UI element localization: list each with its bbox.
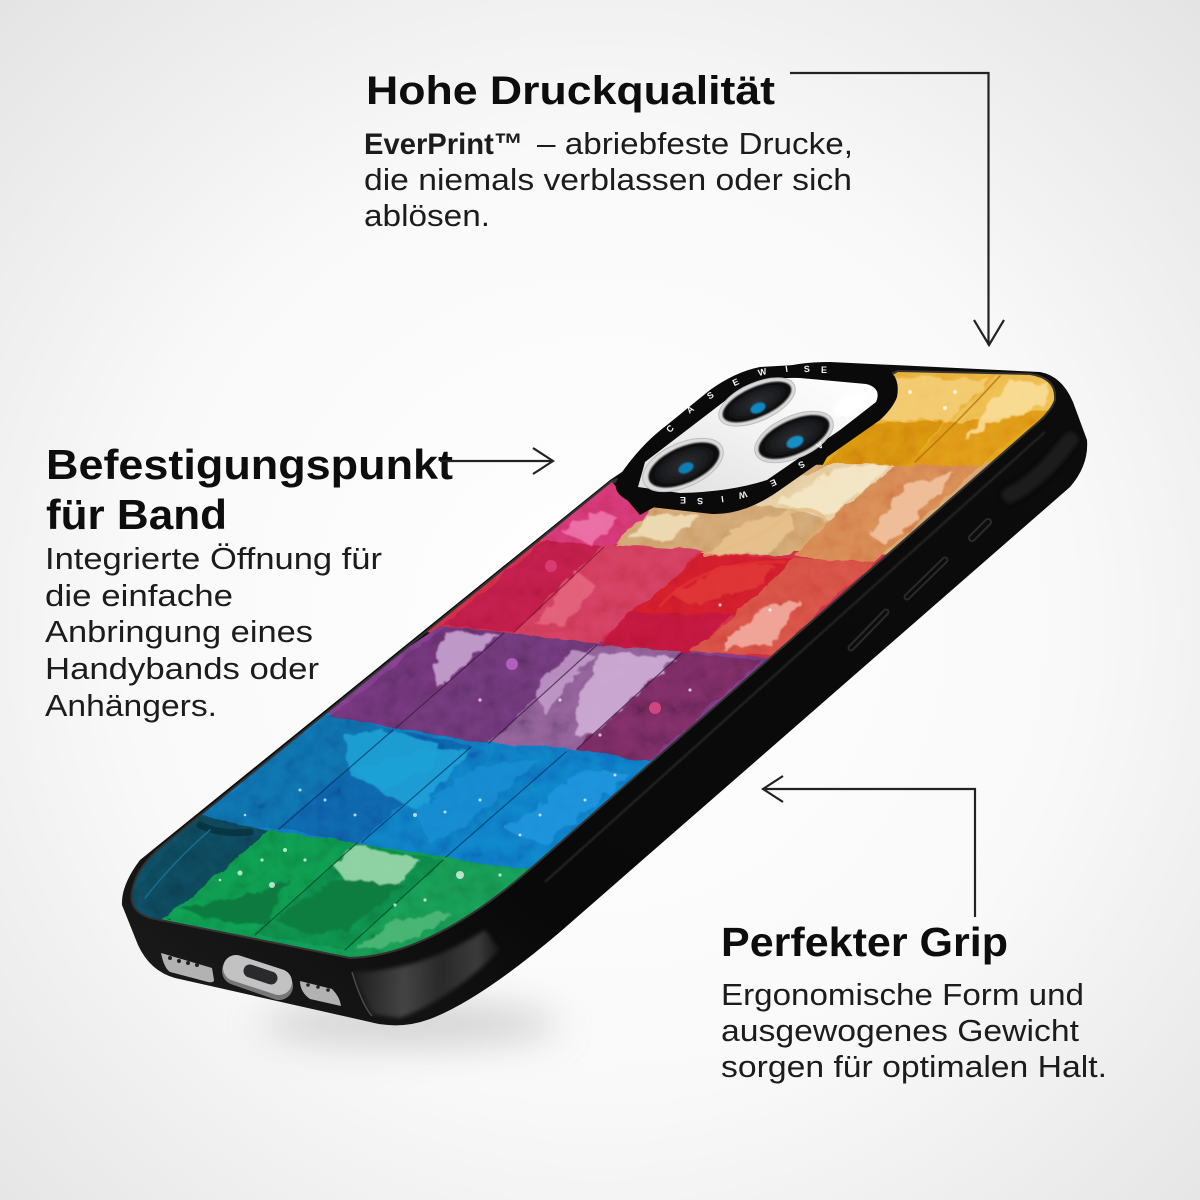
case body xyxy=(122,362,1087,1025)
body text: Handybands oder xyxy=(45,651,319,686)
body text: sorgen für optimalen Halt. xyxy=(721,1049,1107,1084)
heading: Hohe Druckqualität xyxy=(366,69,775,113)
paint light patches xyxy=(180,378,1050,950)
callout: perfect grip xyxy=(721,919,1107,1084)
camera glass xyxy=(638,378,878,493)
right speaker grille xyxy=(300,981,341,1006)
ring lettering: W xyxy=(737,489,748,501)
heading xyxy=(46,441,453,538)
heading: für Band xyxy=(46,491,227,538)
body text: – abriebfeste Drucke, xyxy=(537,126,853,161)
body text: die niemals verblassen oder sich xyxy=(364,162,852,197)
ring lettering: C xyxy=(837,413,848,426)
ring lettering: S xyxy=(796,459,807,470)
body text: Anbringung eines xyxy=(45,614,313,649)
body text xyxy=(45,541,382,723)
body text: die einfache xyxy=(45,578,233,613)
paint texture grain xyxy=(120,360,1070,970)
body text: EverPrint™ xyxy=(364,128,523,161)
case side step xyxy=(545,432,1045,882)
side buttons xyxy=(851,440,1070,648)
heading: Befestigungspunkt xyxy=(46,441,453,488)
ring lettering: A xyxy=(685,403,696,416)
ring lettering: I xyxy=(785,364,789,374)
arrow: grip xyxy=(763,776,975,917)
ring lettering: I xyxy=(720,494,724,504)
ring lettering: E xyxy=(680,495,686,505)
body text: ablösen. xyxy=(364,198,490,233)
camera glass glare xyxy=(829,387,871,423)
paint tiles xyxy=(125,360,1070,965)
rim of case xyxy=(133,372,1054,957)
left speaker grille xyxy=(161,953,214,982)
arrow: print quality xyxy=(790,73,1004,345)
phone with rainbow paint case xyxy=(100,360,1087,1025)
ring lettering: W xyxy=(757,366,768,378)
charging port xyxy=(236,968,279,986)
ring lettering: C xyxy=(664,423,676,435)
heading: Perfekter Grip xyxy=(721,919,1008,965)
callout: strap attachment xyxy=(45,441,453,723)
camera lenses xyxy=(635,368,841,503)
callout: print quality xyxy=(364,69,853,233)
camera island xyxy=(616,363,898,514)
phone shadow xyxy=(260,1000,560,1048)
ring lettering xyxy=(664,364,848,506)
body text: Integrierte Öffnung für xyxy=(45,541,382,576)
ring lettering: S xyxy=(705,390,716,401)
body text: ausgewogenes Gewicht xyxy=(721,1013,1079,1048)
body text: Ergonomische Form und xyxy=(721,977,1084,1012)
paint droplets xyxy=(219,390,957,907)
ring lettering: S xyxy=(697,496,703,506)
ring lettering: E xyxy=(731,376,741,388)
body text: Anhängers. xyxy=(45,688,217,723)
ring lettering: S xyxy=(804,364,810,374)
ring lettering: E xyxy=(821,365,827,375)
body text xyxy=(721,977,1107,1084)
paint band underlays xyxy=(133,414,1044,957)
ring lettering: E xyxy=(768,477,778,489)
paint artwork xyxy=(132,372,1054,957)
ring lettering: A xyxy=(814,439,825,452)
body text xyxy=(364,126,853,233)
paint seams xyxy=(145,376,1000,950)
arrow: strap attachment xyxy=(440,448,553,474)
corner reflection xyxy=(352,930,500,1018)
